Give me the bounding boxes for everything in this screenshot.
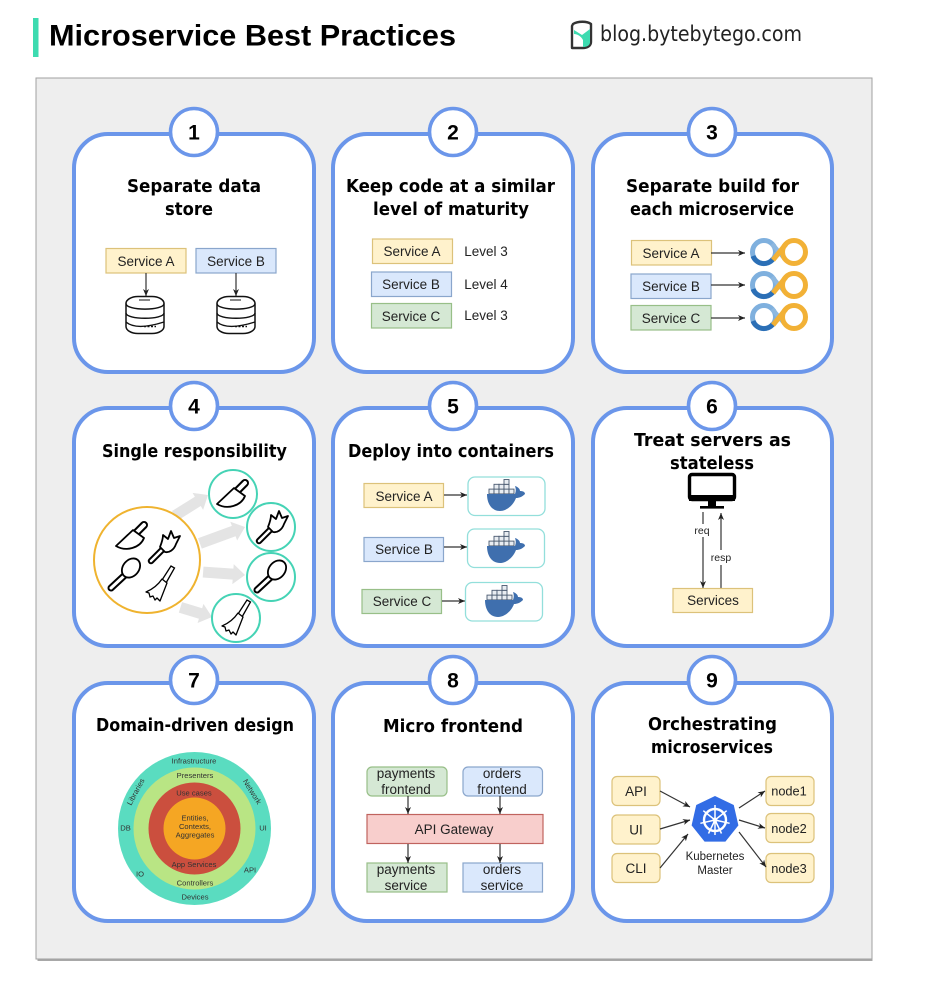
icon: fork (247, 503, 295, 551)
kubernetes label: Master (697, 865, 733, 877)
payments service (367, 862, 447, 893)
payments service: payments (377, 862, 436, 877)
big circle with utensils (94, 507, 200, 613)
panel 2: similar level of maturity: 2 (447, 122, 459, 144)
service B: Service B (207, 254, 265, 269)
onion diagram: Entities, (181, 814, 209, 822)
orders service: service (481, 878, 523, 893)
service C row (372, 304, 508, 328)
service B row: Service B (382, 277, 440, 292)
API box: API (625, 784, 647, 799)
service A (106, 248, 186, 273)
heading: Domain-driven design (96, 715, 294, 736)
panel 5: deploy into containers: 5 (447, 396, 459, 418)
service C row: Level 3 (464, 308, 508, 323)
arrow (145, 273, 147, 296)
service A row: Level 3 (464, 244, 508, 259)
title: Microservice Best Practices (49, 20, 456, 52)
site url: blog.bytebytego.com (600, 22, 802, 46)
panel 9: orchestrating microservices (593, 656, 832, 921)
panel 4: single responsibility (74, 382, 314, 646)
node3 box: node3 (771, 861, 807, 876)
onion diagram: Infrastructure (172, 756, 216, 766)
service C build (631, 306, 806, 330)
resp arrow (711, 513, 731, 588)
panel 8: micro frontend: 8 (447, 670, 459, 692)
service A container: Service A (375, 489, 433, 504)
onion diagram: Use cases (176, 788, 212, 798)
onion diagram: Network (241, 777, 263, 806)
service A row (372, 239, 508, 264)
service C container: Service C (373, 594, 432, 609)
payments service: service (385, 878, 427, 893)
onion diagram: UI (259, 824, 267, 832)
onion diagram: DB (120, 824, 131, 832)
node1 box (766, 776, 814, 806)
heading: Separate build for (626, 176, 799, 197)
panel 7: domain-driven design (74, 656, 314, 921)
icon: database A (126, 296, 164, 334)
payments frontend: payments (377, 766, 436, 781)
service B row (372, 272, 508, 296)
onion diagram: Aggregates (176, 830, 215, 840)
heading: Micro frontend (383, 716, 523, 737)
heading: Deploy into containers (348, 441, 554, 462)
API box (612, 776, 660, 806)
icon: monitor (689, 474, 735, 509)
orders frontend (463, 766, 542, 797)
orders frontend: frontend (477, 782, 527, 797)
icon: kubernetes (692, 796, 738, 842)
service B build (631, 274, 806, 298)
kubernetes label: Kubernetes (686, 851, 745, 863)
payments frontend: frontend (381, 782, 431, 797)
onion diagram: Contexts, (179, 822, 211, 831)
services box (673, 588, 752, 612)
service B row: Level 4 (464, 277, 508, 292)
panel 1: separate data store (74, 108, 314, 372)
panel 3: separate build (593, 108, 832, 372)
icon: knife (209, 470, 257, 518)
icon: spoon (247, 553, 295, 601)
onion diagram: IO (136, 870, 144, 878)
API gateway: API Gateway (415, 822, 494, 837)
onion diagram: App Services (172, 860, 217, 869)
service A build: Service A (642, 246, 700, 261)
UI box: UI (629, 822, 643, 838)
node1 box: node1 (771, 784, 807, 798)
heading: level of maturity (373, 199, 529, 220)
API gateway (367, 814, 543, 844)
panel 1: separate data store: 1 (188, 122, 200, 144)
arrows (408, 796, 500, 863)
service B container: Service B (375, 542, 433, 557)
payments frontend (367, 766, 447, 797)
service A row: Service A (383, 244, 441, 259)
service C build: Service C (642, 311, 701, 326)
service A build (632, 240, 806, 265)
UI box (612, 815, 660, 844)
panel 9: orchestrating microservices: 9 (706, 670, 718, 692)
heading: each microservice (630, 199, 794, 220)
service B container (364, 529, 544, 568)
gray arrows (170, 487, 248, 627)
heading: Treat servers as (634, 430, 791, 451)
icon: ByteByteGo logo (572, 22, 591, 48)
service C container (362, 582, 542, 621)
CLI box (612, 854, 660, 882)
resp arrow: resp (711, 552, 731, 564)
req arrow (694, 512, 710, 588)
title accent bar (33, 18, 38, 57)
heading: Separate data (127, 176, 261, 197)
service C row: Service C (382, 309, 441, 324)
node2 box: node2 (771, 821, 807, 836)
service B (196, 248, 276, 273)
heading: Single responsibility (102, 441, 287, 462)
heading: store (165, 199, 213, 220)
panel 8: micro frontend (333, 656, 573, 921)
orders frontend: orders (483, 766, 521, 781)
heading: microservices (651, 737, 773, 758)
node2 box (766, 814, 814, 842)
icon: broom (212, 594, 260, 642)
panel 4: single responsibility: 4 (188, 396, 200, 418)
arrows (660, 791, 766, 868)
services box: Services (687, 593, 739, 608)
service A: Service A (117, 254, 175, 269)
panel 5: deploy into containers (333, 382, 573, 646)
service A container (364, 477, 545, 516)
panel 6: stateless servers (593, 382, 832, 646)
panel 3: separate build: 3 (706, 122, 718, 144)
onion diagram: Controllers (177, 878, 214, 888)
service B build: Service B (642, 279, 700, 294)
onion diagram: API (244, 866, 256, 874)
icon: database B (217, 296, 255, 334)
panel 7: domain-driven design: 7 (188, 670, 200, 692)
heading: Keep code at a similar (346, 176, 555, 197)
orders service (463, 862, 542, 893)
node3 box (766, 854, 814, 882)
onion diagram (118, 752, 271, 905)
onion diagram: Presenters (177, 771, 214, 780)
heading: Orchestrating (648, 714, 777, 735)
onion diagram: Devices (181, 892, 209, 902)
CLI box: CLI (625, 861, 647, 876)
heading: stateless (670, 453, 754, 474)
onion diagram: Libraries (125, 777, 147, 807)
panel 6: stateless servers: 6 (706, 396, 718, 418)
panel 2: similar level of maturity (333, 108, 573, 372)
req arrow: req (694, 525, 710, 537)
arrow (235, 273, 237, 296)
orders service: orders (483, 862, 521, 877)
